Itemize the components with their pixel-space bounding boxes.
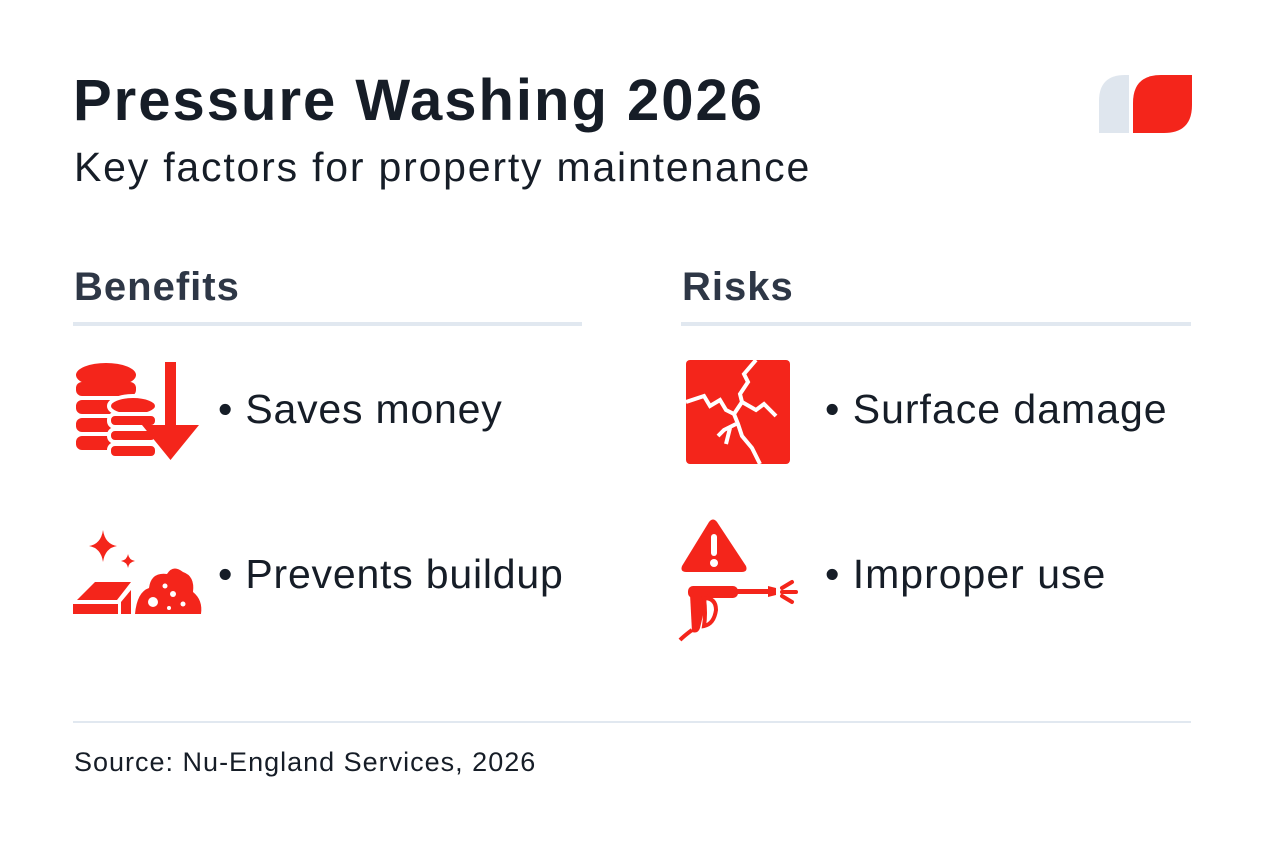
icon: cracked surface — [686, 360, 790, 464]
text: Improper use: • Improper use — [825, 551, 1106, 597]
text: Surface damage: • Surface damage — [825, 386, 1168, 432]
heading: Risks: Risks — [682, 265, 794, 309]
source: Source: Nu-England Services, 2026 — [74, 747, 536, 777]
text: Saves money: • Saves money — [218, 386, 503, 432]
logo — [1099, 75, 1192, 133]
subtitle: Key factors for property maintenance — [74, 144, 811, 190]
icon: warning + pressure gun — [678, 520, 798, 642]
title: Pressure Washing 2026 — [73, 68, 764, 133]
icon: clean vs buildup — [73, 530, 202, 614]
icon: coins with down arrow — [76, 362, 199, 460]
text: Prevents buildup: • Prevents buildup — [218, 551, 564, 597]
heading: Benefits: Benefits — [74, 265, 240, 309]
